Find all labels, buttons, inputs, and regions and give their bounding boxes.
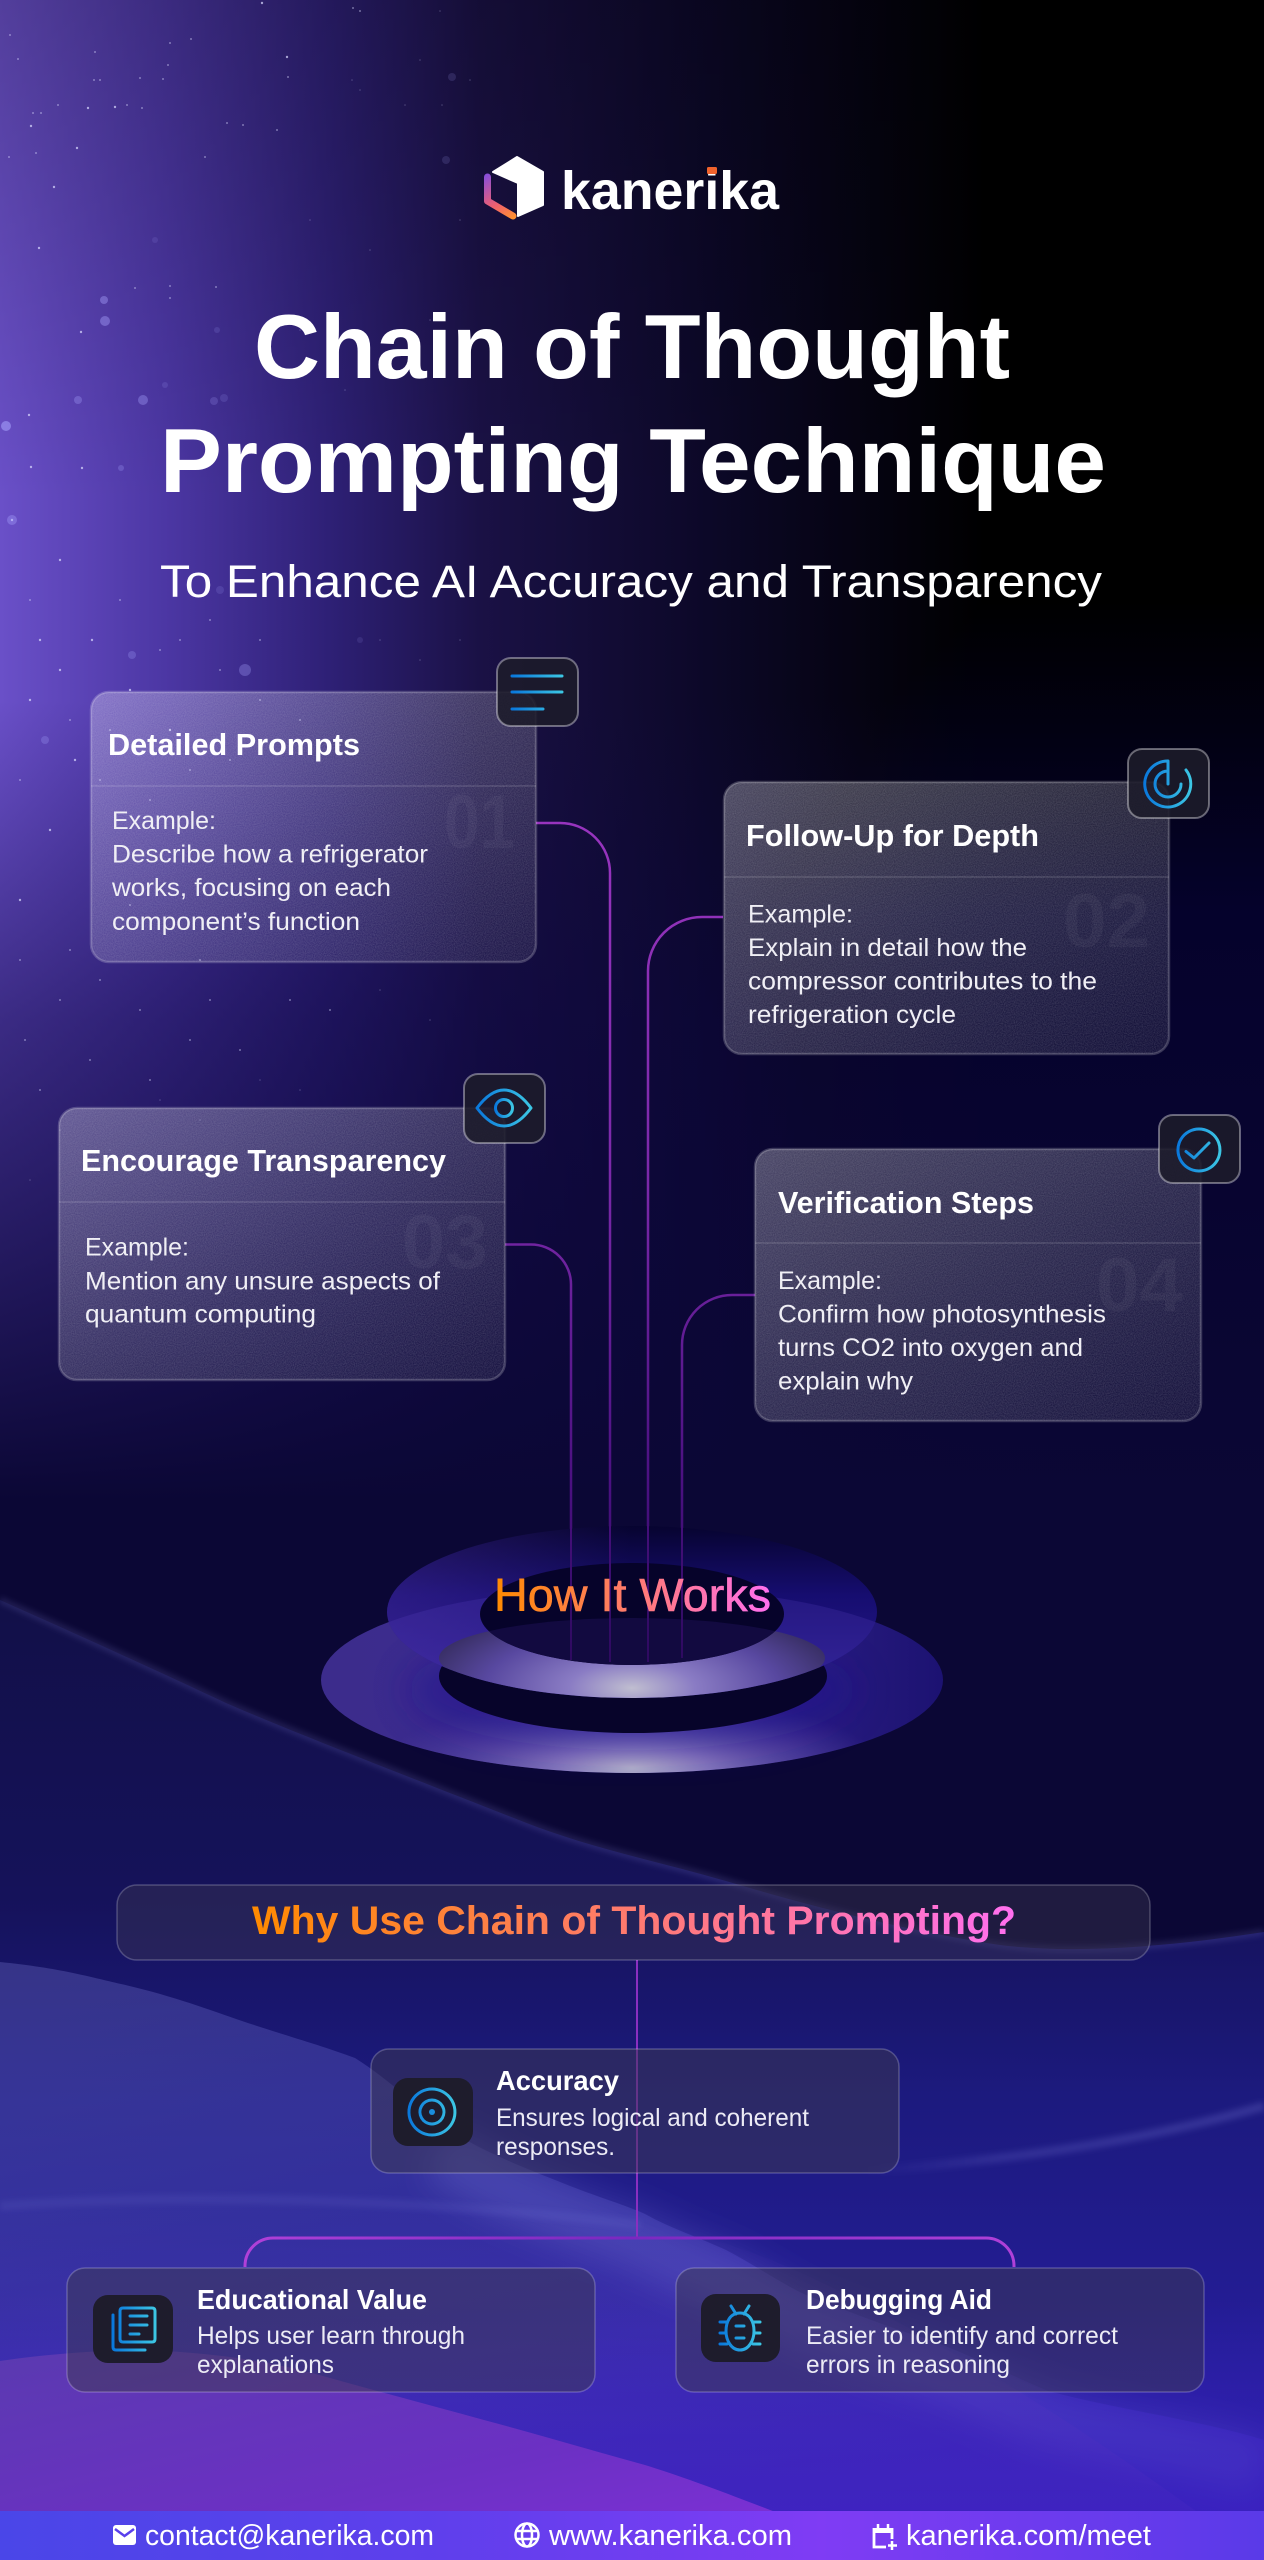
logo wordmark: kanerika xyxy=(561,161,780,221)
footer bar xyxy=(0,2511,1264,2560)
panel: why heading xyxy=(117,1885,1150,1960)
body: Example: xyxy=(778,1267,882,1295)
body: Confirm how photosynthesis xyxy=(778,1300,1106,1328)
heading: Detailed Prompts xyxy=(108,727,360,762)
subtitle: To Enhance AI Accuracy and Transparency xyxy=(160,556,1103,607)
text: Helps user learn through xyxy=(197,2322,465,2350)
background bokeh xyxy=(1,73,456,744)
lower disc xyxy=(321,1587,943,1773)
text xyxy=(197,2284,465,2379)
body: Mention any unsure aspects of xyxy=(85,1268,440,1296)
title xyxy=(160,297,1106,512)
heading: how it works: How It Works xyxy=(494,1569,771,1621)
logo xyxy=(488,157,780,221)
heading: Verification Steps xyxy=(778,1185,1034,1220)
footer website: www.kanerika.com xyxy=(548,2520,792,2552)
text: Debugging Aid xyxy=(806,2284,992,2315)
icon: mail xyxy=(113,2525,136,2545)
panel: card 04 verification steps xyxy=(755,1115,1240,1421)
title: Prompting Technique xyxy=(160,411,1106,512)
body xyxy=(748,900,1097,1029)
icon: eye xyxy=(464,1074,545,1143)
title: Chain of Thought xyxy=(254,297,1010,398)
text: Easier to identify and correct xyxy=(806,2322,1118,2350)
body xyxy=(778,1267,1106,1396)
text: Educational Value xyxy=(197,2284,427,2315)
body: turns CO2 into oxygen and xyxy=(778,1334,1083,1362)
icon: globe xyxy=(516,2524,538,2546)
number 01: 01 xyxy=(444,780,515,865)
icon: target power xyxy=(1128,749,1209,818)
footer meeting link: kanerika.com/meet xyxy=(906,2520,1151,2552)
icon: lines xyxy=(497,658,578,726)
icon: bug xyxy=(701,2294,780,2362)
text: Ensures logical and coherent xyxy=(496,2104,809,2132)
text xyxy=(806,2284,1118,2379)
text: responses. xyxy=(496,2133,615,2161)
background waves xyxy=(0,1600,1264,2560)
body: quantum computing xyxy=(85,1300,316,1328)
heading: Encourage Transparency xyxy=(81,1143,447,1178)
text: explanations xyxy=(197,2351,334,2379)
panel: card 02 follow-up for depth xyxy=(724,749,1209,1054)
panel: educational value xyxy=(67,2268,595,2392)
body: Example: xyxy=(112,807,216,835)
heading: Follow-Up for Depth xyxy=(746,818,1039,853)
icon: check circle xyxy=(1159,1115,1240,1183)
panel: card 03 encourage transparency xyxy=(59,1074,545,1380)
body: explain why xyxy=(778,1368,914,1396)
connector lines xyxy=(505,823,755,1660)
body: Explain in detail how the xyxy=(748,934,1027,962)
body: refrigeration cycle xyxy=(748,1001,956,1029)
body xyxy=(85,1234,440,1328)
logo mark xyxy=(488,157,543,216)
text xyxy=(496,2065,809,2161)
background stars xyxy=(9,3,470,1180)
body: component’s function xyxy=(112,908,360,936)
icon: calendar xyxy=(874,2524,897,2550)
disc shadow xyxy=(407,1619,857,1750)
text: Accuracy xyxy=(496,2065,619,2096)
body: Describe how a refrigerator xyxy=(112,840,428,868)
number 04: 04 xyxy=(1096,1243,1183,1328)
body: Example: xyxy=(748,900,853,928)
body: compressor contributes to the xyxy=(748,968,1097,996)
upper disc xyxy=(387,1526,877,1698)
footer email: contact@kanerika.com xyxy=(145,2520,434,2552)
number 03: 03 xyxy=(402,1200,488,1285)
icon: target xyxy=(393,2078,473,2146)
podium: how it works xyxy=(321,1510,943,1773)
connector lines for benefits xyxy=(245,1960,1014,2267)
panel: accuracy xyxy=(371,2049,899,2173)
body: Example: xyxy=(85,1234,189,1262)
panel: debugging aid xyxy=(676,2268,1204,2392)
body: works, focusing on each xyxy=(111,874,391,902)
body xyxy=(111,807,428,936)
text: errors in reasoning xyxy=(806,2351,1010,2379)
inner dark ellipse xyxy=(480,1563,784,1665)
icon: document xyxy=(93,2295,173,2363)
panel: card 01 detailed prompts xyxy=(91,658,578,962)
panel: why heading: Why Use Chain of Thought Prompting? xyxy=(252,1899,1016,1943)
number 02: 02 xyxy=(1063,879,1150,964)
connector lines into disc xyxy=(571,1510,682,1662)
